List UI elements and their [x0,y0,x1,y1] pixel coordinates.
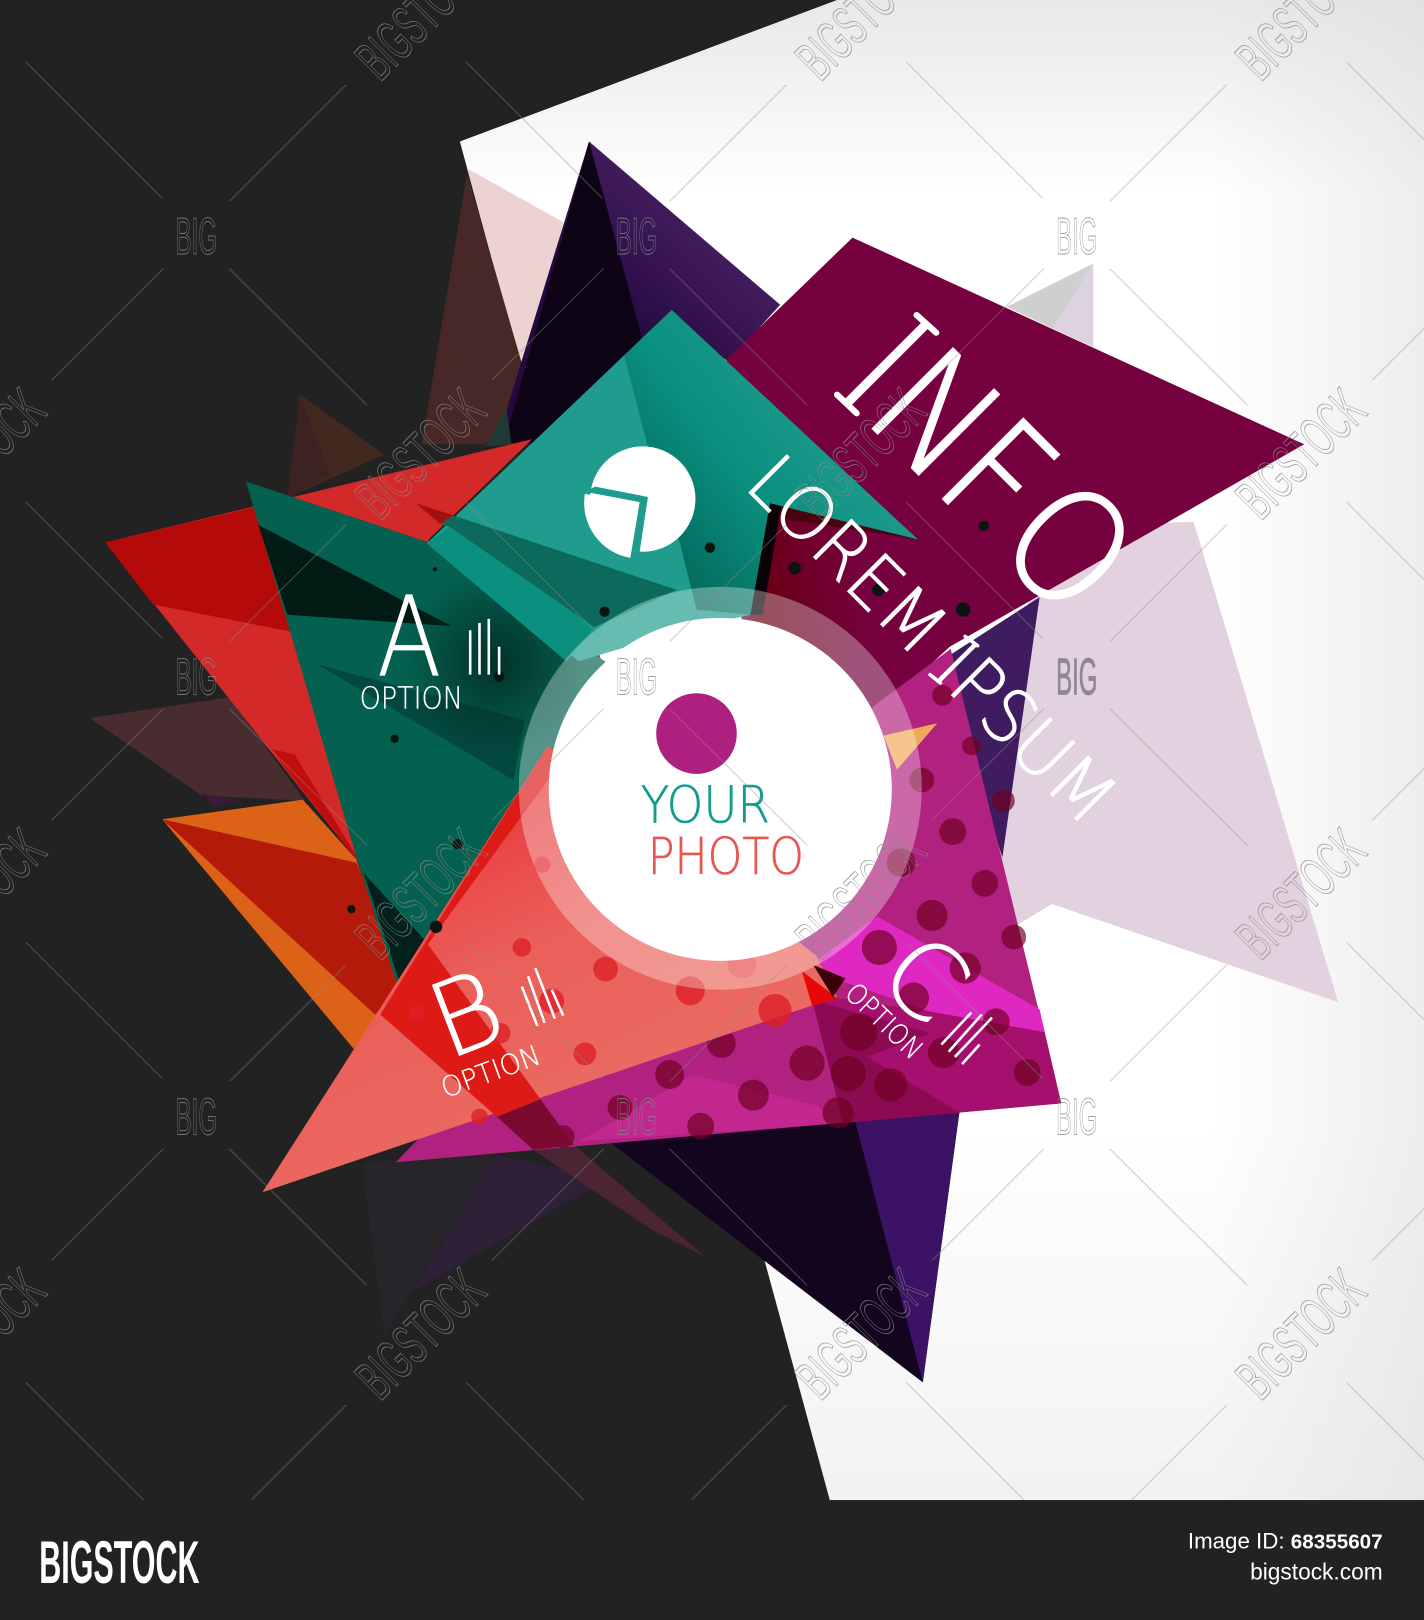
your photo label: YOUR [641,775,770,834]
text: BIG [1056,647,1097,705]
purple lower triangle [589,1085,963,1382]
panel: coral option B triangle [262,746,845,1192]
orange spike [884,723,937,770]
watermark BIG marks [176,207,1097,1145]
translucent ring [519,587,922,990]
watermark BIG marks: BIG [176,1087,217,1145]
small dark dots over the teal and maroon [347,521,989,933]
pale back triangles [467,168,1338,1002]
panel: magenta dotted option C [396,649,1061,1162]
indigo middle triangle [940,597,1040,858]
footer logo: BIGSTOCK [39,1529,199,1596]
watermark BIGSTOCK marks: BIGSTOCK [344,378,498,531]
option B label: OPTION [436,1038,545,1105]
footer image id: Image ID: 68355607 [1188,1529,1383,1554]
watermark BIGSTOCK marks: BIGSTOCK [784,818,938,971]
dots pattern [552,685,1041,1148]
watermark BIGSTOCK marks: BIGSTOCK [784,378,938,531]
watermark BIG marks: BIG [616,647,657,705]
option C label: C [858,911,991,1048]
icon: option C bars [941,1012,992,1064]
photo circle [549,618,892,961]
dark back spikes on dark side [90,174,705,1335]
icon: pie chart with wedge [584,446,695,558]
text: BIG [1056,1087,1097,1145]
option B label: B [413,947,520,1083]
panel: teal top icon section [415,310,918,661]
notch in the maroon banner [749,503,918,703]
panel: info maroon banner [726,238,1304,713]
option A label [360,574,499,717]
watermark BIGSTOCK marks: BIGSTOCK [344,1258,498,1411]
panel: red left shards [105,439,532,878]
white angled background panel [460,0,1424,1500]
icon: option B bars [522,968,563,1026]
info heading: INFO [807,287,1169,650]
panel: orange shard [162,800,408,1050]
lorem ipsum heading: LOREM IPSUM [730,439,1132,841]
your photo label: PHOTO [648,827,804,886]
option C label: OPTION [838,976,930,1066]
footer bar [0,1500,1424,1620]
text: BIG [1056,207,1097,265]
option B label [413,947,563,1105]
icon: option A bars [470,619,499,675]
watermark BIGSTOCK marks: BIGSTOCK [784,1258,938,1411]
footer site url: bigstock.com [1250,1559,1383,1585]
watermark BIG marks: BIG [616,207,657,265]
icon: purple dot [656,693,737,774]
watermark BIG marks: BIG [616,1087,657,1145]
option A label: A [377,574,441,703]
coral dots [409,856,792,1125]
purple top triangle [486,142,780,446]
watermark BIG marks: BIG [176,207,217,265]
watermark BIGSTOCK marks: BIGSTOCK [344,818,498,971]
watermark BIG marks: BIG [176,647,217,705]
panel: dark teal option A [246,481,620,987]
your photo label [641,775,804,886]
option A label: OPTION [360,682,463,717]
